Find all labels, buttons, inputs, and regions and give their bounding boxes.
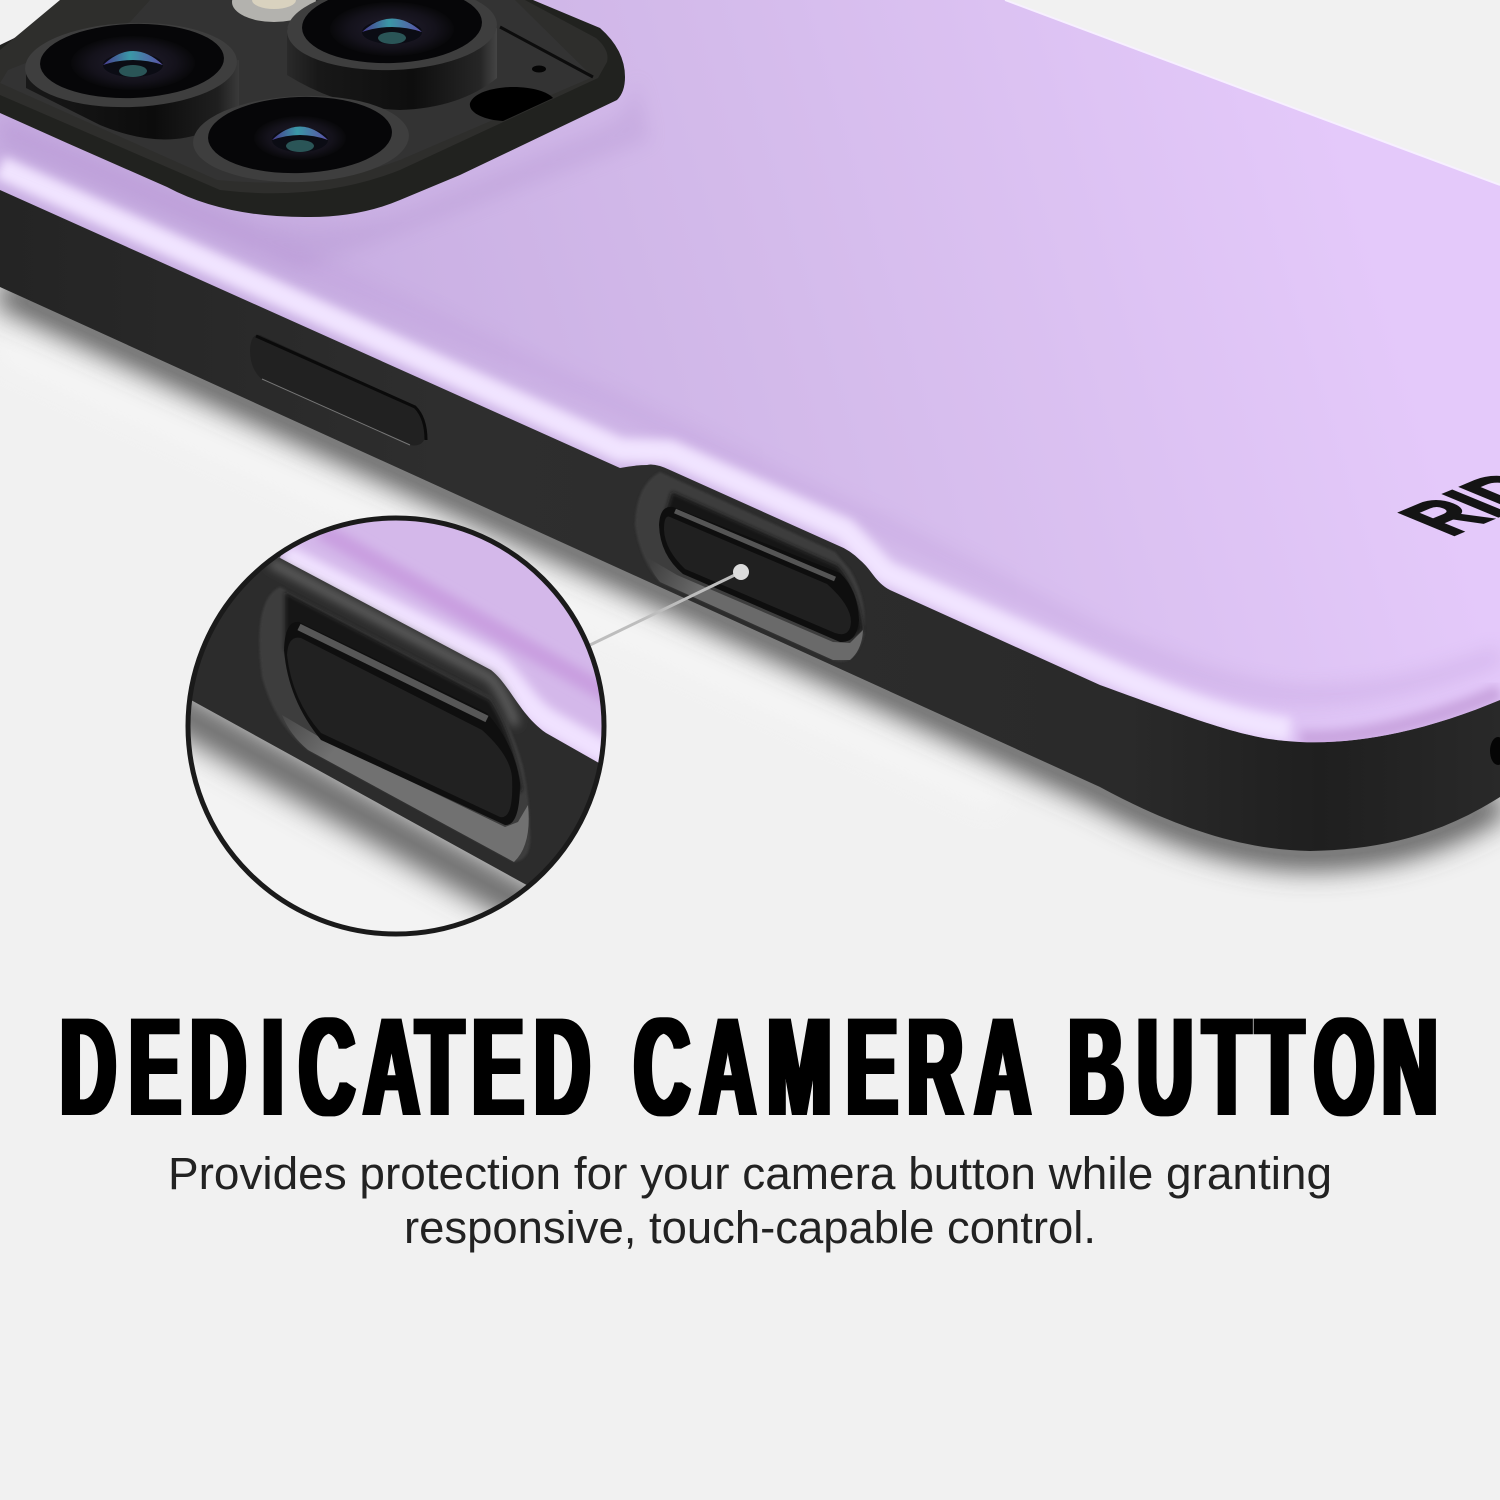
description text: responsive, touch-capable control. xyxy=(404,1202,1096,1253)
island rim xyxy=(0,0,625,217)
description text xyxy=(168,1148,1332,1253)
side button xyxy=(250,335,426,445)
callout leader line xyxy=(590,564,749,645)
well shadow line xyxy=(500,27,593,77)
button pad xyxy=(664,517,851,634)
wall over highlight xyxy=(262,558,620,800)
magnified surround bevel xyxy=(259,587,530,862)
magnified recess xyxy=(284,622,520,825)
case lavender back xyxy=(0,0,1500,742)
recess highlight xyxy=(675,511,835,579)
lens 2 barrel xyxy=(287,28,497,110)
phone drop shadow xyxy=(0,290,1500,854)
button recess xyxy=(659,507,859,642)
button body xyxy=(250,335,426,445)
callout dot xyxy=(733,564,749,580)
rim top face xyxy=(0,0,608,193)
lens 1 xyxy=(24,19,238,111)
lens 1 barrel xyxy=(26,74,227,140)
magnified lavender xyxy=(280,520,602,762)
case side wall xyxy=(0,150,1500,851)
lidar opening xyxy=(470,87,553,121)
button shadow line xyxy=(256,336,426,440)
shaded upper surround xyxy=(665,492,863,640)
floor glow xyxy=(0,345,1000,800)
island well xyxy=(0,0,593,182)
surround lower strip xyxy=(648,558,863,660)
phone case xyxy=(0,0,1500,851)
magnified highlight xyxy=(284,556,620,762)
button surround xyxy=(635,472,865,662)
button lower highlight xyxy=(262,379,410,445)
lens 2 xyxy=(286,0,498,74)
magnified sheen xyxy=(320,530,620,701)
floor xyxy=(180,510,610,940)
magnified recess highlight xyxy=(299,627,487,719)
edge sheen xyxy=(0,125,1500,739)
camera button xyxy=(635,472,865,662)
magnified lower strip xyxy=(282,715,529,862)
circle outline xyxy=(188,518,604,934)
heading: DEDICATED CAMERA BUTTON xyxy=(60,989,1438,1145)
shaded upper surround xyxy=(285,592,522,800)
magnified detail circle xyxy=(186,516,606,936)
flash xyxy=(232,0,316,22)
microphone dot xyxy=(532,66,546,72)
magnified button pad xyxy=(287,638,512,817)
floor shadow xyxy=(190,700,526,919)
description text: Provides protection for your camera button while granting xyxy=(168,1148,1332,1199)
magnified case wall xyxy=(192,556,598,885)
island shadow xyxy=(0,72,650,270)
port opening xyxy=(1490,737,1500,765)
top edge highlight xyxy=(1005,0,1500,185)
lens 3 xyxy=(192,92,410,186)
camera island xyxy=(0,0,650,270)
wall band beneath lavender xyxy=(270,562,516,725)
